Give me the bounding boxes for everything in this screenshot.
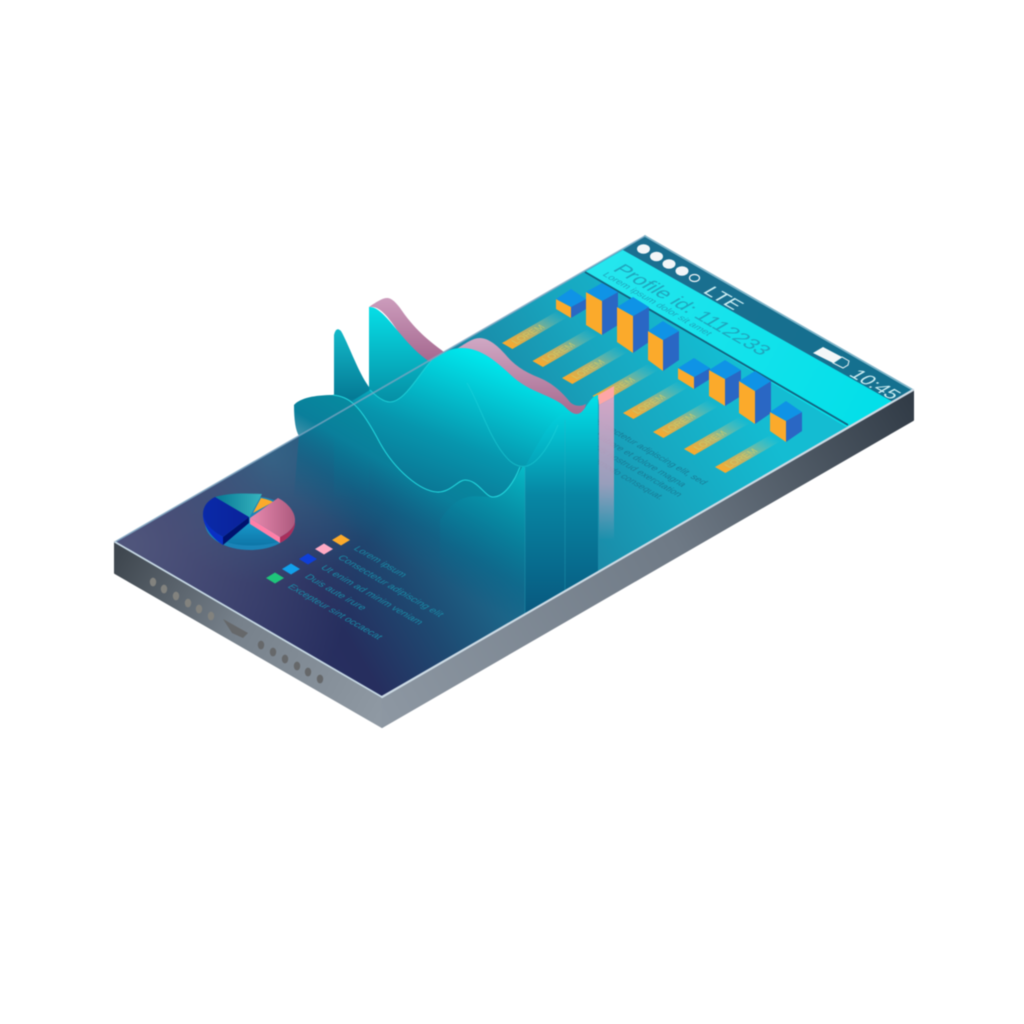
legend — [266, 534, 446, 641]
salmon strip top — [598, 386, 614, 405]
bar 8 — [770, 401, 802, 442]
battery icon — [813, 347, 849, 368]
curtain edges — [524, 511, 566, 613]
blue slice — [224, 518, 281, 546]
label strips: LOREM — [569, 358, 608, 381]
back wave — [368, 306, 430, 402]
label strips: LOREM — [540, 341, 579, 364]
teal slice — [215, 493, 262, 518]
phone body — [115, 390, 913, 727]
pink ribbon 1 — [369, 298, 444, 362]
legend labels: Consectetur adipiscing elit — [334, 554, 446, 619]
legend labels: Ut enim ad minim veniam — [317, 564, 426, 627]
paragraph text: do eiusmod tempor ut labore et dolore magna — [513, 387, 690, 489]
profile title band — [585, 250, 893, 428]
bar 7 — [739, 371, 771, 424]
right side face — [382, 390, 913, 727]
navy slice — [203, 497, 249, 545]
pink slice — [250, 498, 295, 543]
pie chart — [203, 493, 295, 550]
paragraph text: Lorem ipsum dolor sit amet, consectetur adipiscing elit, sed — [485, 357, 710, 487]
label strips: LOREM — [600, 376, 639, 399]
paragraph text: aliqua ut enim ad minim quis nostrud exercitation — [497, 390, 685, 499]
3D bar chart — [556, 283, 802, 442]
paragraph text: ullamco laboris nisi ut aliquip ex ea commodo consequat. — [450, 376, 667, 502]
bar 6 — [709, 360, 741, 406]
legend labels: Duis aute irure — [301, 573, 369, 612]
legend swatches — [266, 534, 350, 584]
status dots — [637, 244, 700, 282]
wave highlight lines — [333, 360, 558, 497]
profile subtitle: Lorem ipsum dolor sit amet — [599, 271, 715, 338]
label strips: LOREM — [691, 429, 730, 452]
label strips — [502, 311, 781, 473]
front wave surface — [293, 394, 522, 546]
label strips: LOREM — [630, 393, 669, 416]
legend labels — [284, 545, 446, 641]
right curtain — [525, 394, 598, 612]
label strips: LOREM — [660, 412, 699, 435]
bar 5 — [678, 358, 710, 389]
front wave bright right section — [472, 466, 526, 524]
header status band — [623, 236, 913, 403]
pink vertical strip — [599, 397, 614, 540]
middle wave surface — [352, 348, 598, 497]
wave chart — [293, 298, 615, 612]
LTE label: LTE — [698, 284, 748, 313]
left side face with speaker holes — [115, 542, 382, 727]
clock: 10:45 — [844, 367, 905, 403]
screen — [115, 236, 913, 697]
bar 2 — [586, 283, 618, 335]
orange slice — [253, 498, 273, 513]
label strips: LOREM — [509, 323, 548, 346]
back spike wave — [333, 328, 370, 404]
profile heading: Profile id: 1112233 — [608, 261, 776, 359]
pie base rim — [205, 496, 295, 550]
bar 3 — [617, 297, 649, 353]
bar 1 — [556, 289, 586, 318]
pink ribbon 2 — [458, 337, 586, 415]
phone edge highlights — [115, 236, 913, 697]
bar 4 — [648, 321, 679, 371]
legend labels: Lorem ipsum — [350, 545, 409, 579]
legend labels: Excepteur sint occaecat — [284, 583, 385, 641]
label strips: LOREM — [722, 447, 761, 470]
